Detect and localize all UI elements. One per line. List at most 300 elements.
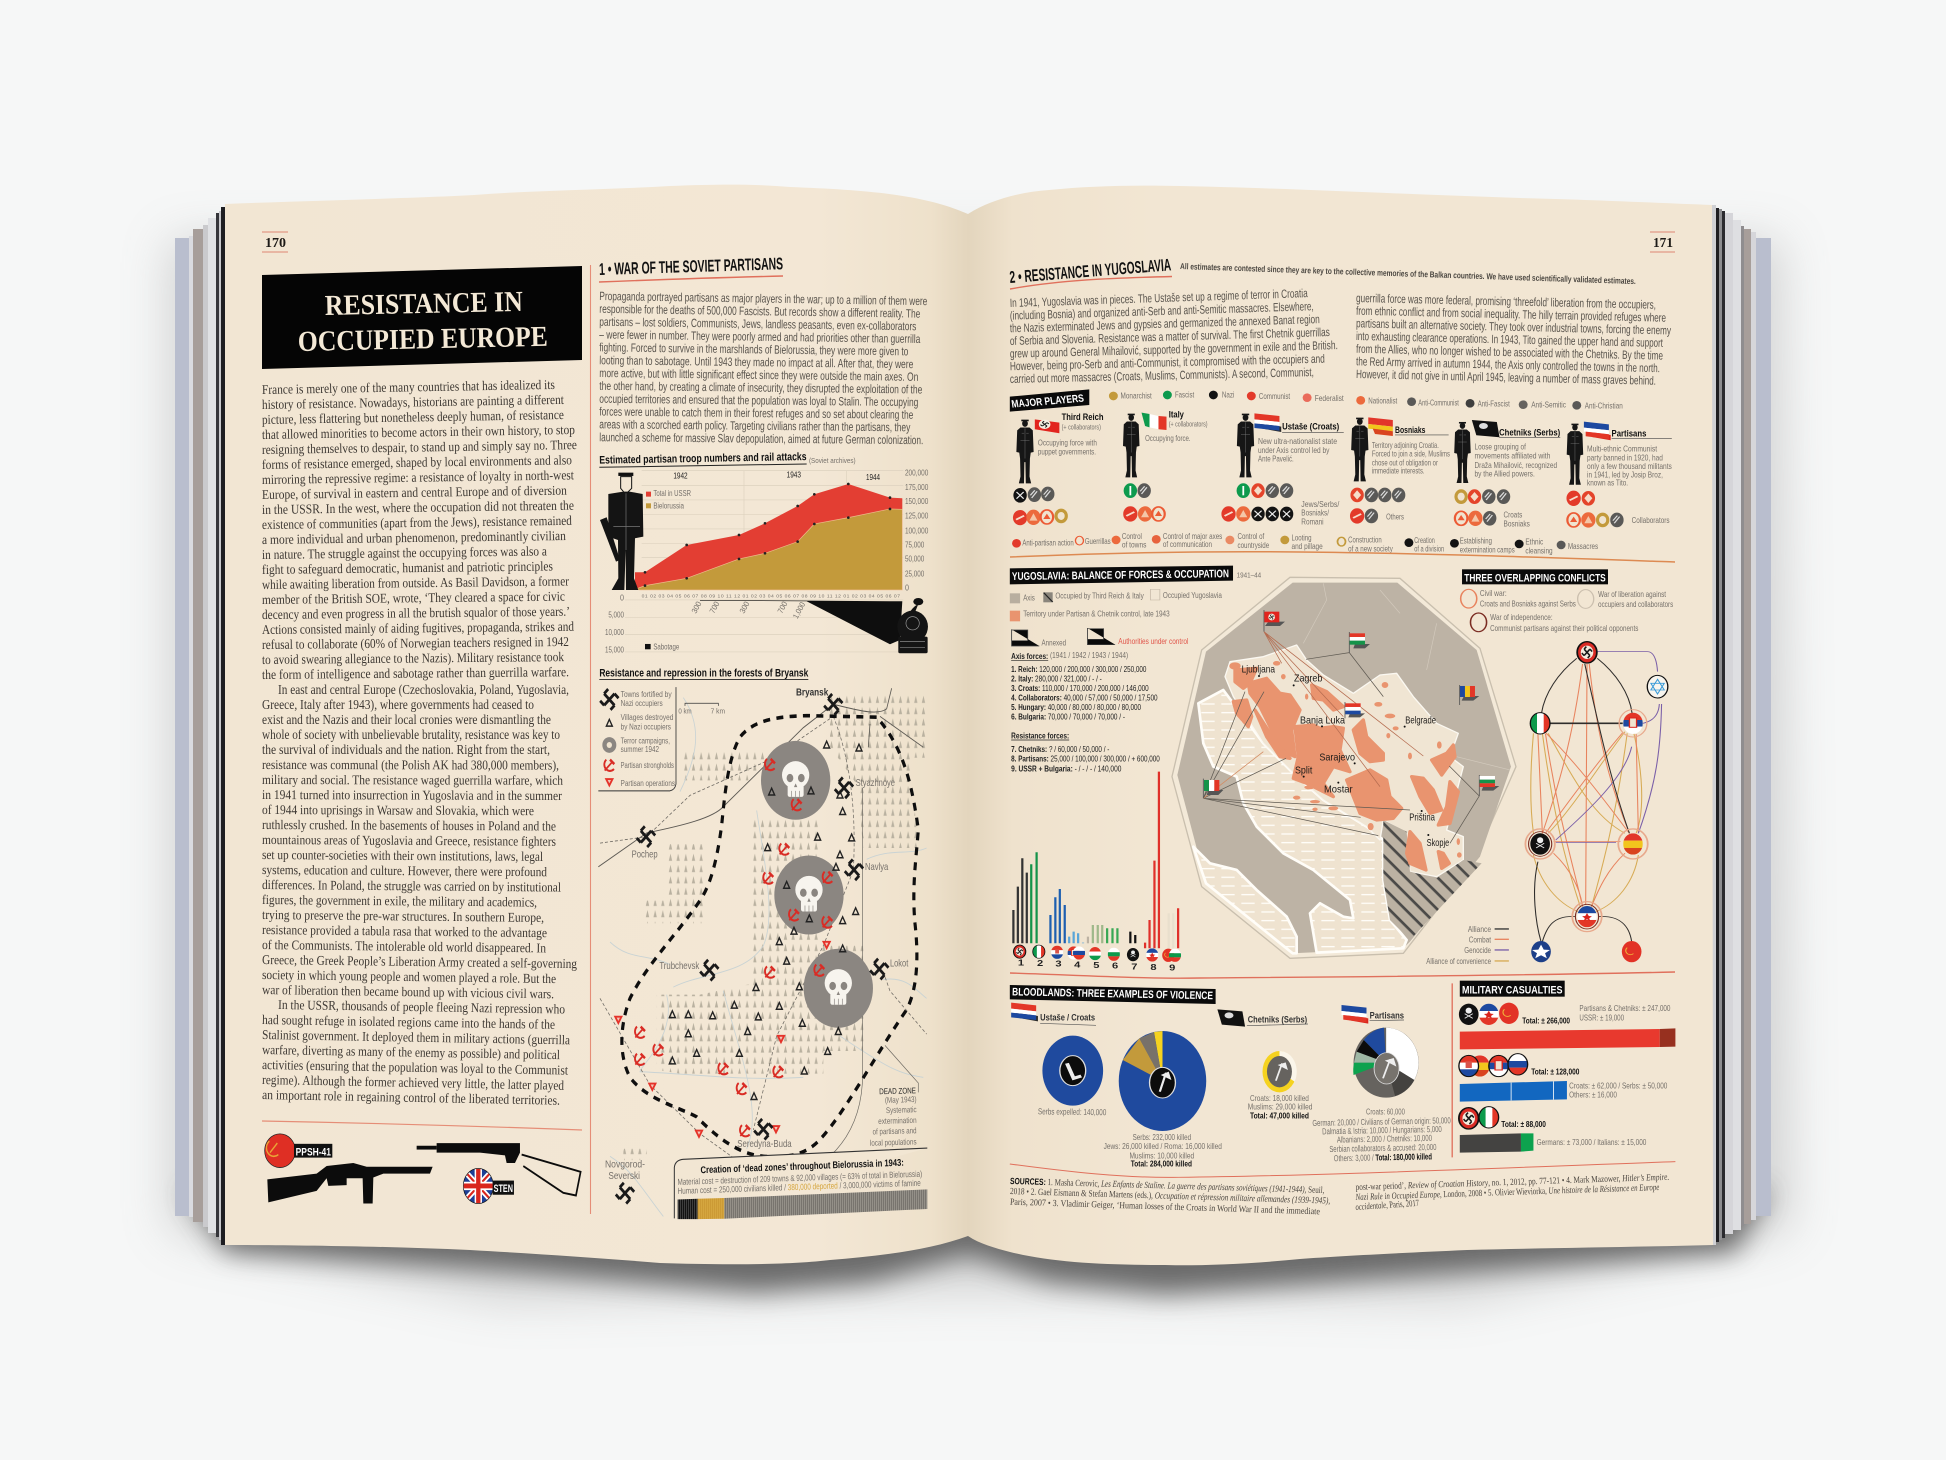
section 2 paragraph, right: from the Allies, who no longer wished to be associated with the Chetniks. By the time: [1356, 342, 1663, 363]
town labels: Lokot: [890, 958, 908, 970]
section 1 paragraph: fighting. Forced to survive in the marshlands of Bielorussia, they were more given to: [599, 340, 909, 358]
conflict key: [1461, 589, 1673, 634]
forest areas: [623, 694, 928, 1160]
action legend: countryside: [1237, 541, 1269, 551]
Chetniks pie: Muslims: 29,000 killed: [1248, 1103, 1313, 1112]
icon: locomotive: [897, 598, 928, 653]
map key: Authorities under control: [1118, 637, 1188, 647]
player: Partisans: Partisans: [1612, 429, 1646, 439]
section 1 paragraph: partisans – lost soldiers, Communists, Jews, landless peasants, even ex-collaborators: [599, 315, 916, 333]
y axis labels: 125,000: [905, 511, 929, 521]
military casualties heading: [1460, 981, 1565, 997]
occupation map: [1172, 577, 1516, 958]
y axis labels: [605, 468, 929, 654]
Ustaše pies: Ustaše / Croats: [1040, 1013, 1095, 1023]
player: Italy: (+ collaborators): [1169, 420, 1208, 428]
left page: [225, 185, 968, 1264]
map heading: Resistance and repression in the forests of Bryansk: [599, 667, 808, 680]
resistance forces list: 7. Chetniks: ? / 60,000 / 50,000 / -: [1011, 745, 1109, 755]
map legend: [598, 687, 676, 791]
body text: left column: decency and even progress in all the brutish squalor of those years.’: [262, 604, 570, 622]
body text: left column: In east and central Europe (Czechoslovakia, Poland, Yugoslavia,: [278, 682, 569, 697]
dead zone annotation: DEAD ZONE: [879, 1086, 916, 1096]
y axis labels: 25,000: [905, 569, 925, 579]
player: Chetniks: movements affiliated with: [1475, 452, 1550, 461]
section 1 paragraph: occupied territories and ensured that the population was loyal to Stalin. The occupying: [599, 392, 918, 409]
player: Ustaše: Ustaše (Croats): [1282, 422, 1340, 432]
casualties: collaborators: Others: ± 16,000: [1569, 1091, 1617, 1100]
section 2 paragraph, left: carried out more massacres (Croats, Muslims, Communists). A second, Communist,: [1010, 365, 1314, 386]
Partisans pie: Croats: 60,000: [1366, 1108, 1405, 1117]
partisan operations: [614, 941, 831, 1139]
sabotage labels: 300: [690, 600, 704, 615]
y axis labels: 0: [620, 593, 624, 603]
casualties: collaborators: Croats: ± 62,000 / Serbs: ± 50,000: [1569, 1082, 1668, 1091]
y axis labels: 5,000: [608, 610, 624, 620]
section 1 paragraph: forces were unable to catch them in their forest refuges and so set about clearing the: [599, 405, 914, 422]
section 1 paragraph: responsible for the deaths of 500,000 Fascists. But records show a different reality. The: [599, 302, 921, 321]
title block: RESISTANCE IN: [324, 286, 523, 322]
ideology legend: Nationalist: [1368, 397, 1397, 406]
player: Third Reich: puppet governments.: [1038, 448, 1096, 457]
Partisans pie: German: 20,000 / Civilians of German origin: 50,000: [1312, 1117, 1451, 1129]
body text: left column: mirroring the repressive regime: a resistance of loyalty in north-west: [262, 467, 574, 487]
panel divider: [1451, 983, 1454, 1157]
section 2 heading: 2 • RESISTANCE IN YUGOSLAVIA: [1009, 255, 1172, 287]
body text: left column: the form of intelligence and sabotage rather than guerrilla warfare.: [262, 664, 569, 682]
balance of forces panel: [1010, 566, 1673, 973]
title block: [262, 266, 582, 369]
y axis labels: 0: [905, 583, 909, 593]
fortified towns: [615, 693, 890, 1205]
month axis: 01 02 03 04 05 06 07 08 09 10 11 12 01 02 03 04 05 06 07 08 09 10 11 12 01 02 03 04 05 06 07: [642, 593, 900, 599]
body text: left column: Stalinist government. It deployed them in military actions (guerrilla: [262, 1027, 570, 1047]
rule above bloodlands: [1010, 972, 1675, 978]
page-block edge, left: [175, 207, 225, 1245]
Chetniks pie: Total: 47,000 killed: [1250, 1112, 1309, 1121]
occupation lines: [1203, 632, 1479, 843]
three overlapping conflicts heading: THREE OVERLAPPING CONFLICTS: [1464, 572, 1606, 584]
town labels: Styazhnoye: [856, 777, 895, 789]
action legend: Ethnic: [1525, 538, 1543, 547]
section 2 heading: [1009, 255, 1172, 289]
chart legend: Bielorussia: [653, 501, 684, 510]
city labels: Ljubljana: [1242, 665, 1276, 676]
Partisans pie: Serbian collaborators & accused: 20,000: [1329, 1143, 1437, 1155]
map key: Territory under Partisan & Chetnik control, late 1943: [1023, 610, 1170, 619]
section 2 paragraph, left: [1010, 286, 1338, 386]
body text: left column: that allowed minorities to become actors in their own history, to stop: [262, 422, 575, 442]
player: Chetniks: by the Allied powers.: [1475, 470, 1535, 479]
body text: left column: resigning themselves to despair, to stand up and simply say no. Three: [262, 437, 577, 457]
Partisans pie: Others: 3,000 / Total: 180,000 killed: [1334, 1153, 1432, 1164]
section 2 paragraph, right: [1356, 291, 1671, 388]
city labels: Banja Luka: [1300, 715, 1346, 726]
body text: left column: while awaiting liberation from outside. As Basil Davidson, a former: [262, 573, 569, 592]
map key: Annexed: [1042, 639, 1066, 648]
body text: left column: Greece, Italy after 1943), where governments had ceased to: [262, 697, 534, 712]
body text: left column: to avoid swearing allegiance to the Nazis). Military resistance took: [262, 649, 564, 667]
scale bar: [678, 703, 725, 716]
forces bar chart: 9: [1169, 964, 1176, 973]
dead zone annotation: of partisans and: [872, 1126, 917, 1137]
body text: left column: in the USSR. In the west, where the occupation did not threaten the: [262, 498, 574, 517]
town labels: Trubchevsk: [659, 961, 699, 972]
map legend: Nazi occupiers: [621, 698, 663, 708]
body text: left column: systems, education and culture. However, there were profound: [262, 862, 547, 879]
y axis labels: 175,000: [905, 482, 929, 492]
sabotage labels: 700: [708, 600, 722, 615]
page-block edge, right: [1712, 205, 1771, 1245]
body text: left column: resistance was communal (the Polish AK had 380,000 members),: [262, 757, 559, 773]
conflict key: Communist partisans against their political opponents: [1490, 624, 1639, 634]
network legend: Combat: [1469, 936, 1491, 945]
conflict key: Civil war:: [1480, 589, 1507, 599]
estimates note: All estimates are contested since they are key to the collective memories of the Balkan countries. We have used scientifically validated estimates.: [1180, 261, 1636, 286]
body text: left column: in nature. The struggle against the occupying forces was also a: [262, 543, 547, 562]
body text: left column: exist and the Nazis and their local cronies were dismantling the: [262, 712, 551, 727]
body text: left column: war of liberation then became bound up with vicious civil wars.: [262, 982, 554, 1001]
ideology legend: Monarchist: [1121, 392, 1152, 401]
casualties: resistance: Total: ± 266,000: [1522, 1017, 1570, 1026]
dead zone annotation: Systematic: [886, 1105, 917, 1115]
Adriatic and Tyrrhenian sea: [1193, 690, 1407, 953]
small partisan pockets: [1229, 661, 1462, 858]
network legend: Genocide: [1464, 946, 1491, 955]
section 2 paragraph, right: However, it did not give in until April 1945, leaving a number of mass graves behind.: [1356, 367, 1656, 388]
body text: left column: regime). Although the former achieved very little, the latter played: [262, 1072, 564, 1093]
player: Bosniaks: immediate interests.: [1372, 467, 1425, 476]
action legend: Creation: [1414, 536, 1435, 546]
axis forces list: 3. Croats: 110,000 / 170,000 / 200,000 / 146,000: [1011, 684, 1149, 694]
title block: OCCUPIED EUROPE: [297, 321, 548, 358]
y axis labels: 200,000: [905, 468, 929, 478]
body text: left column: France is merely one of the many countries that has idealized its: [262, 377, 555, 397]
gold area: Bielorussia: [635, 509, 902, 590]
Chetniks pie: Croats: 18,000 killed: [1250, 1094, 1309, 1104]
forces bar chart: 1: [1018, 959, 1025, 968]
icon: PPSH-41 submachine gun: [267, 1163, 433, 1204]
axis forces list: 1. Reich: 120,000 / 200,000 / 300,000 / 250,000: [1011, 665, 1147, 675]
city labels: Zagreb: [1294, 674, 1322, 685]
Partisans pie: [1312, 1005, 1451, 1164]
ideology legend: Nazi: [1222, 391, 1234, 400]
player: Italy: [1123, 410, 1208, 522]
resistance forces list: 9. USSR + Bulgaria: - / - / - / 140,000: [1011, 765, 1122, 774]
action legend: Control of: [1237, 532, 1264, 542]
network legend: [1426, 925, 1509, 966]
Partisans pie: Albanians: 2,000 / Chetniks: 10,000: [1337, 1134, 1432, 1145]
y axis labels: 150,000: [905, 496, 929, 506]
dead zone annotation: local populations: [870, 1137, 917, 1148]
section 2 paragraph, left: the Nazis exterminated Jews and gypsies and germanized the annexed Banat region: [1010, 312, 1320, 335]
player: Partisans: [1566, 422, 1672, 528]
network legend: Alliance: [1468, 925, 1491, 935]
ideology legend: Fascist: [1175, 391, 1194, 400]
page number 171: [1650, 232, 1675, 252]
player: Bosniaks: [1350, 417, 1450, 524]
player: Third Reich: Third Reich: [1062, 412, 1104, 423]
section 1 heading: [599, 254, 783, 282]
action legend: and pillage: [1291, 542, 1323, 552]
casualties: Axis: Total: ± 88,000: [1501, 1120, 1546, 1130]
icon: Soviet roundel with PPSH-41 label: PPSH-41: [296, 1146, 331, 1159]
area chart: troop numbers and rail attacks: [599, 451, 929, 654]
body text: left column: society in which young people and women played a role. But the: [262, 967, 556, 986]
body text: left column: fight to safeguard democratic, humanist and patriotic principles: [262, 558, 553, 577]
town labels: Bryansk: [796, 687, 829, 699]
rule above sources: [1010, 1162, 1675, 1177]
ideology legend: Anti-Fascist: [1478, 400, 1510, 409]
partisan strongholds: [635, 759, 833, 1136]
section 2 paragraph, right: partisans built an alternative society. They took over industrial towns, forcing the enemy: [1356, 316, 1671, 337]
bloodlands heading: [1010, 985, 1216, 1004]
axis forces list: [1011, 651, 1158, 722]
action legend: extermination camps: [1460, 546, 1515, 555]
body text: left column: ruthlessly crushed. In the basements of houses in Poland and the: [262, 817, 556, 834]
resistance forces list: 8. Partisans: 25,000 / 100,000 / 300,000 / + 600,000: [1011, 755, 1160, 764]
dead zones panel: [674, 1148, 927, 1219]
player: Ustaše: under Axis control led by: [1258, 446, 1329, 456]
casualties: resistance: USSR: ± 19,000: [1579, 1014, 1624, 1023]
forces bar chart: 4: [1074, 961, 1081, 970]
conflict key: War of liberation against: [1598, 590, 1666, 600]
forces bar chart: 8: [1150, 963, 1157, 972]
player: Bosniaks: Others: [1386, 513, 1404, 522]
map legend: Partisan operations: [621, 779, 675, 788]
map key: Occupied by Third Reich & Italy: [1055, 592, 1144, 601]
dead zones panel: Material cost = destruction of 209 towns & 92,000 villages (= 63% of total in Bielorussia): [677, 1169, 922, 1187]
black area: sabotage: [700, 600, 902, 644]
sources: Nazi Rule in Occupied Europe, London, 2008 • 5. Olivier Wieviorka, Une histoire de la Résistance en Europe: [1355, 1182, 1660, 1203]
player: Ustaše: New ultra-nationalist state: [1258, 437, 1337, 447]
section 1 paragraph: [599, 289, 928, 447]
section 1 paragraph: the other hand, by creating a climate of insecurity, they disrupted the exploitation of the: [599, 379, 923, 397]
city labels: Sarajevo: [1319, 753, 1355, 764]
major players heading: [1010, 389, 1089, 412]
Partisans pie: Partisans: [1370, 1011, 1404, 1021]
casualties: collaborators: [1459, 1054, 1668, 1102]
y axis labels: 50,000: [905, 554, 925, 564]
player: Ustaše: Jews/Serbs/: [1301, 500, 1339, 510]
y axis labels: 100,000: [905, 525, 929, 535]
year labels: 1943: [787, 470, 801, 479]
player: Chetniks: [1454, 420, 1561, 529]
section 2 paragraph, left: of Serbia and Slovenia. Resistance was a matter of survival. The first Chetnik guerrillas: [1010, 325, 1330, 348]
axis forces list: Axis forces:: [1011, 652, 1048, 662]
body text: left column: Europe, of survival in eastern and central Europe and of diversion: [262, 483, 567, 502]
chart legend: [645, 489, 691, 651]
conflict key: occupiers and collaborators: [1598, 600, 1673, 610]
player: Partisans: only a few thousand militants: [1587, 462, 1672, 472]
player: Ustaše: Bosniaks/: [1301, 509, 1329, 518]
balance heading: [1010, 566, 1261, 584]
player: Bosniaks: Bosniaks: [1395, 425, 1425, 436]
casualties: collaborators: Total: ± 128,000: [1531, 1068, 1580, 1077]
player: Chetniks: Bosniaks: [1504, 520, 1530, 529]
military casualties heading: MILITARY CASUALTIES: [1462, 984, 1563, 996]
player: Partisans: party banned in 1920, had: [1587, 454, 1663, 463]
section 1 paragraph: launched a scheme for massive Slav depopulation, aimed at future German colonization.: [599, 430, 923, 447]
city labels: [1242, 665, 1449, 849]
sources: Paris, 2007 • 3. Vladimir Geiger, ‘Human losses of the Croats in World War II and the immediate: [1010, 1197, 1320, 1217]
sources: [1010, 1172, 1669, 1217]
resistance forces list: [1011, 732, 1160, 774]
action legend: of towns: [1122, 541, 1146, 550]
red area: total in USSR: [635, 484, 902, 590]
forces bar chart: 7: [1131, 963, 1138, 972]
axis forces list: 2. Italy: 280,000 / 321,000 / - / -: [1011, 675, 1102, 684]
player: Bosniaks: chose out of obligation or: [1372, 459, 1438, 468]
action legend: Control of major axes: [1163, 532, 1222, 542]
y axis labels: 10,000: [605, 627, 624, 637]
player: Partisans: known as Tito.: [1587, 479, 1628, 488]
player: Partisans: Multi-ethnic Communist: [1587, 445, 1657, 454]
resistance forces list: Resistance forces:: [1011, 732, 1069, 741]
player: Ustaše: Romani: [1301, 518, 1324, 527]
section 1 paragraph: more active, but with little significant effect since they were outside the main axes. On: [599, 366, 918, 384]
chart legend: Sabotage: [653, 642, 680, 651]
terror campaign circles: [761, 741, 873, 1028]
town labels: [605, 687, 908, 1182]
sabotage labels: [690, 600, 807, 620]
map legend: by Nazi occupiers: [621, 722, 671, 732]
map key: Occupied Yugoslavia: [1163, 591, 1222, 601]
player: Chetniks: Chetniks (Serbs): [1499, 428, 1561, 438]
ideology legend: [1109, 391, 1623, 411]
city labels: Priština: [1409, 813, 1435, 824]
section 1 paragraph: areas with a scorched earth policy. Targeting civilians rather than the partisans, they: [599, 417, 910, 434]
Partisans pie: Dalmatia & Istria: 10,000 / Hungarians: 5,000: [1322, 1125, 1442, 1137]
icon: Soviet roundel with PPSH-41 label: [265, 1134, 332, 1168]
sabotage labels: 1,000: [791, 600, 807, 620]
year labels: 1944: [866, 473, 880, 482]
section 2 paragraph, left: In 1941, Yugoslavia was in pieces. The Ustaše set up a regime of terror in Croatia: [1010, 286, 1308, 310]
player: Partisans: Collaborators: [1632, 516, 1670, 526]
player: Italy: Occupying force.: [1145, 434, 1191, 444]
map key: [1010, 589, 1222, 648]
page number 170: [262, 232, 288, 252]
action legend: cleansing: [1525, 547, 1553, 556]
sabotage labels: 700: [776, 600, 790, 615]
section 1 paragraph: Propaganda portrayed partisans as major players in the war; up to a million of them were: [599, 289, 928, 308]
body text: left column: military and social. The resistance waged guerrilla warfare, which: [262, 772, 563, 788]
axis forces list: 5. Hungary: 40,000 / 80,000 / 80,000 / 80,000: [1011, 703, 1141, 713]
ideology legend: Anti-Semitic: [1531, 401, 1566, 410]
player: Chetniks: Croats: [1504, 511, 1522, 520]
casualties: Axis: Germans: ± 73,000 / Italians: ± 15,000: [1537, 1138, 1647, 1148]
three overlapping conflicts heading: [1462, 569, 1608, 584]
body text: left column: In the USSR, thousands of people fleeing Nazi repression who: [278, 997, 565, 1017]
y axis labels: 15,000: [605, 644, 624, 654]
body text: left column: trying to preserve the pre-war structures. In southern Europe,: [262, 907, 544, 925]
player: Third Reich: (+ collaborators): [1062, 423, 1101, 431]
icon: partisan soldier: [600, 473, 643, 590]
page number 170: 170: [265, 236, 286, 251]
rule above weapons: [262, 1121, 582, 1130]
player: Bosniaks: Territory adjoining Croatia.: [1372, 441, 1439, 451]
action legend: Looting: [1291, 534, 1312, 543]
section 2 paragraph, left: grew up around General Mihailović, supported by the government in exile and the British.: [1010, 338, 1338, 361]
body text: left column: forms of resistance emerged, shaped by local environments and also: [262, 452, 572, 472]
section 2 paragraph, left: (including Bosnia) and organized anti-Serb and anti-Semitic massacres. Elsewhere,: [1010, 299, 1314, 323]
Chetniks pie: Chetniks (Serbs): [1248, 1015, 1307, 1025]
body text: left column: picture, less flattering but nonetheless deeply human, of resistance: [262, 407, 564, 427]
map legend: Towns fortified by: [621, 689, 672, 699]
forces bar chart: [1013, 772, 1181, 973]
scale bar: 7 km: [711, 707, 725, 716]
book shadow: [170, 240, 1790, 1300]
conflict key: War of independence:: [1490, 613, 1553, 623]
sources: post-war period’, Review of Croatian History, no. 1, 2012, pp. 77-121 • 4. Mark Mazower, Hitler’s Empire.: [1355, 1172, 1669, 1193]
action legend: Control: [1122, 532, 1142, 542]
Ustaše pies: Muslims: 10,000 killed: [1129, 1152, 1194, 1161]
city labels: Belgrade: [1405, 715, 1436, 726]
body text: left column: history of resistance. Nowadays, historians are painting a different: [262, 392, 564, 412]
player: Ustaše: [1221, 413, 1344, 527]
action legend: [1012, 532, 1598, 556]
player: Italy: Italy: [1169, 410, 1184, 420]
map legend: Partisan strongholds: [621, 761, 674, 770]
Ustaše pies: Serbs: 232,000 killed: [1133, 1133, 1191, 1143]
axis forces list: 6. Bulgaria: 70,000 / 70,000 / 70,000 / -: [1011, 713, 1125, 722]
player: Ustaše: Ante Pavelić.: [1258, 455, 1294, 464]
rule below major players: [1010, 552, 1675, 562]
town labels: Navlya: [865, 861, 889, 873]
conflict network: [1525, 642, 1668, 962]
body text: left column: refusal to collaborate (60% of Norwegian teachers resigned in 1942: [262, 634, 569, 652]
section 2 paragraph, left: However, being pro-Serb and anti-Communist, it compromised with the occupiers and: [1010, 352, 1325, 373]
section 2 paragraph, right: from ethnic conflict and from social inequality. The hilly terrain provided refuges where: [1356, 304, 1666, 325]
forces bar chart: 5: [1093, 961, 1100, 970]
major players panel: [1010, 389, 1672, 556]
player: Bosniaks: Forced to join a side, Muslims: [1372, 450, 1450, 459]
year labels: 1942: [673, 471, 688, 480]
city labels: Mostar: [1324, 785, 1353, 796]
right page: [968, 186, 1713, 1265]
body text: left column: in 1941 turned into insurrection in Yugoslavia and in the summer: [262, 787, 562, 803]
sources: occidentale, Paris, 2017: [1355, 1198, 1420, 1213]
forces bar chart: 2: [1037, 959, 1044, 968]
ideology legend: Anti-Communist: [1418, 399, 1459, 408]
map legend: Villages destroyed: [621, 713, 673, 722]
action legend: Establishing: [1460, 537, 1492, 546]
chart legend: Total in USSR: [653, 489, 691, 498]
occupied Yugoslavia: [1225, 645, 1463, 877]
forces bar chart: 3: [1055, 960, 1062, 969]
network legend: Alliance of convenience: [1426, 957, 1491, 966]
section 2 paragraph, right: guerrilla force was more federal, promising ‘threefold’ liberation from the occupiers,: [1356, 291, 1656, 312]
dead zone annotation: extermination: [878, 1115, 917, 1126]
icon: British roundel with STEN label: STEN: [494, 1184, 513, 1195]
destroyed villages: [669, 741, 862, 1100]
forces bar chart: 6: [1112, 962, 1119, 971]
balance heading: YUGOSLAVIA: BALANCE OF FORCES & OCCUPATION: [1012, 567, 1229, 583]
town labels: Novgorod-: [605, 1159, 645, 1171]
ideology legend: Anti-Christian: [1585, 402, 1623, 411]
action legend: of a division: [1414, 545, 1444, 554]
Ustaše pies: Serbs expelled: 140,000: [1038, 1108, 1107, 1118]
hatched Albania and Greece: [1383, 820, 1482, 940]
ideology legend: Federalist: [1315, 394, 1344, 404]
major players heading: MAJOR PLAYERS: [1011, 392, 1085, 410]
map flags: [1203, 610, 1499, 798]
ideology legend: Communist: [1259, 392, 1290, 402]
Ustaše pies: Jews: 26,000 killed / Roma: 16,000 killed: [1104, 1142, 1222, 1152]
partisan and Chetnik territory: [1233, 668, 1458, 870]
Ustaše pies: [1011, 1003, 1222, 1169]
page number 171: 171: [1653, 236, 1673, 251]
